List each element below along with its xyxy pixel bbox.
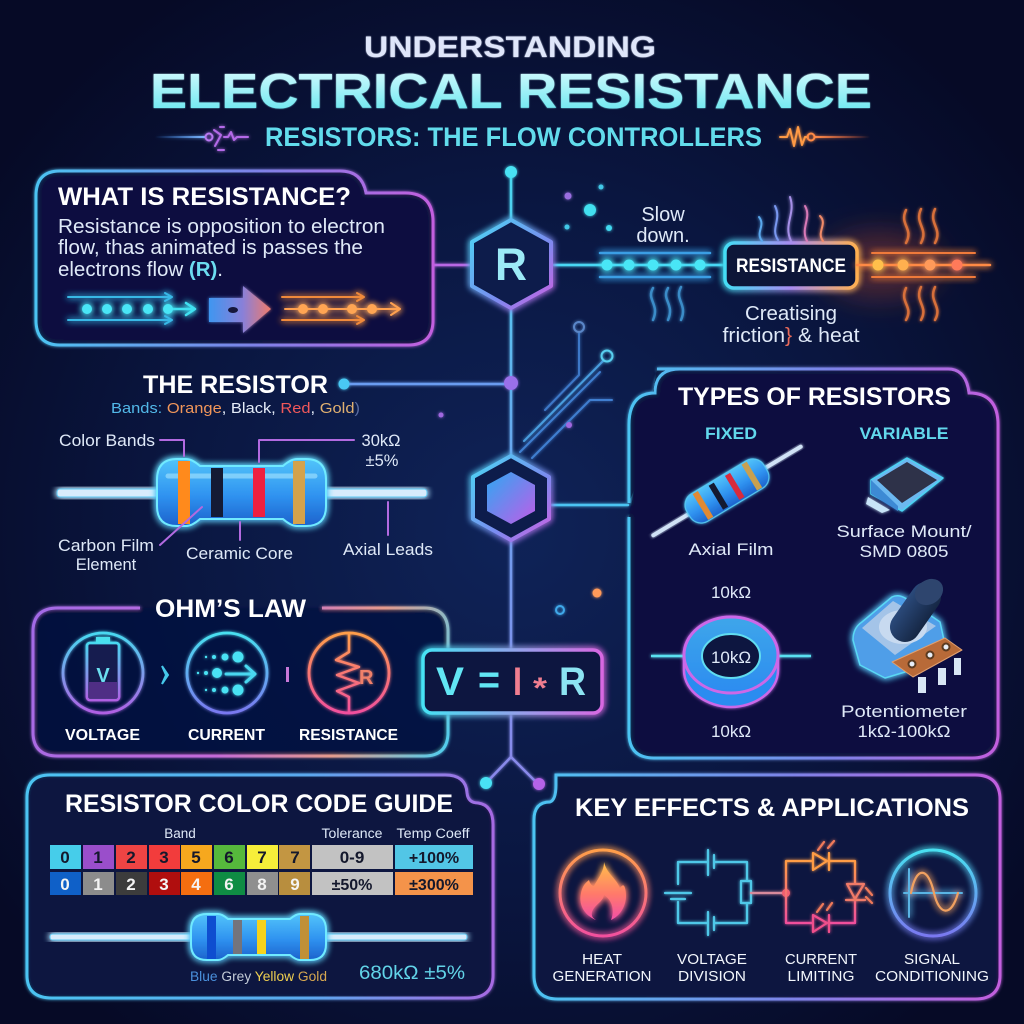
- title: electrical resistance: ELECTRICAL RESISTANCE: [150, 65, 872, 119]
- callout labels: ±5%: [366, 452, 399, 470]
- resistance label: RESISTANCE: [736, 256, 846, 277]
- heat waves blue: [651, 287, 683, 320]
- color table row 2: ±300%: [409, 877, 459, 894]
- heat waves orange top: [904, 209, 937, 243]
- icon: subtitle left circuit: [155, 127, 248, 150]
- label: creating friction: Creatising: [745, 303, 837, 325]
- panel: key effects and applications: [534, 775, 1000, 999]
- label: creating friction: friction} & heat: [722, 325, 860, 347]
- formula text: =: [478, 658, 500, 702]
- callout lines: [160, 440, 388, 545]
- label: potentiometer: Potentiometer: [841, 702, 967, 721]
- color table row 1: [50, 845, 473, 869]
- orange glow: [820, 231, 940, 299]
- central spine connector: [338, 166, 724, 790]
- section: the resistor: [57, 371, 433, 574]
- color table row 2: 4: [191, 875, 201, 894]
- icon: axial resistor: [643, 432, 811, 550]
- table headers: Tolerance: [322, 826, 382, 841]
- band name caption: Blue Grey Yellow Gold: [190, 969, 327, 984]
- body text: Resistance is opposition to electron: [58, 216, 385, 238]
- color table row 2: 2: [126, 875, 136, 894]
- heading: RESISTOR COLOR CODE GUIDE: [65, 790, 453, 818]
- color table row 1: 2: [126, 848, 136, 867]
- formula: V = I * R: [423, 650, 602, 713]
- table headers: [164, 826, 470, 841]
- callout labels: Axial Leads: [343, 541, 433, 559]
- title: understanding: UNDERSTANDING: [364, 31, 656, 64]
- color table row 1: 7: [257, 848, 267, 867]
- resistor body: [157, 459, 326, 526]
- icon: SMD resistor: [866, 458, 943, 513]
- heat waves above box: [759, 197, 823, 241]
- formula text: I: [513, 660, 522, 704]
- band: gold: [300, 916, 309, 959]
- electrons before resistance: [68, 293, 195, 324]
- icon labels: [65, 727, 398, 744]
- band: grey: [233, 920, 242, 954]
- table headers: Temp Coeff: [396, 826, 470, 841]
- heat waves orange bottom: [904, 287, 937, 320]
- effect labels: HEAT: [582, 951, 622, 968]
- hexagon core node: [473, 456, 549, 540]
- effect labels: SIGNAL: [904, 951, 960, 968]
- effect labels: CONDITIONING: [875, 968, 989, 985]
- operator bar: [286, 667, 289, 682]
- color table row 2: 9: [290, 875, 300, 894]
- band: yellow: [257, 920, 266, 954]
- icon: voltage: [63, 633, 143, 713]
- panel: types of resistors: [629, 369, 998, 758]
- icon: voltage divider circuit: [665, 850, 751, 935]
- heading: TYPES OF RESISTORS: [678, 383, 951, 411]
- icon: disc resistor: [651, 617, 811, 707]
- icon labels: RESISTANCE: [299, 727, 398, 744]
- label: 10k center: 10kΩ: [711, 648, 751, 667]
- icon: resistance: [309, 633, 389, 713]
- color table row 1: 5: [191, 848, 201, 867]
- title block: [150, 31, 872, 152]
- arrow: chevron: [162, 666, 168, 684]
- color table row 2: 6: [224, 875, 234, 894]
- label: surface mount: [836, 522, 972, 561]
- circuit traces and decorative nodes: [438, 184, 612, 614]
- hexagon R node: [472, 220, 551, 308]
- color table row 2: 3: [159, 875, 169, 894]
- label: potentiometer: [841, 702, 967, 741]
- icon: current limiting circuit: [751, 841, 872, 932]
- label: creating friction: [722, 303, 860, 347]
- label: potentiometer: 1kΩ-100kΩ: [858, 722, 950, 741]
- color table row 2: 0: [60, 875, 70, 894]
- heading: WHAT IS RESISTANCE?: [58, 183, 351, 211]
- resistor body: [191, 914, 326, 960]
- callout labels: 30kΩ: [362, 432, 400, 450]
- icon: voltage: V: [96, 665, 110, 687]
- formula text: [436, 658, 586, 705]
- band: red: [253, 468, 265, 517]
- electrons slowing: [600, 253, 710, 277]
- color table row 2: 8: [257, 875, 267, 894]
- leads: [50, 934, 467, 940]
- leads: [57, 489, 427, 497]
- label: 10k bottom: 10kΩ: [711, 722, 751, 741]
- icon labels: CURRENT: [188, 727, 265, 744]
- panel border: [33, 608, 448, 756]
- effect labels: VOLTAGE: [677, 951, 747, 968]
- resistance box: [725, 243, 857, 288]
- panel: resistor color code guide: [27, 775, 493, 998]
- electrons hot: [857, 253, 990, 277]
- effect labels: LIMITING: [788, 968, 854, 985]
- panel: ohm's law: [33, 595, 448, 756]
- label: surface mount: Surface Mount/: [836, 522, 972, 541]
- arrow: resistance block: [209, 286, 271, 333]
- icon: subtitle right resistor: [780, 127, 870, 146]
- effect labels: [552, 951, 989, 985]
- band: blue: [207, 916, 216, 959]
- panel: what is resistance: [36, 171, 433, 345]
- effect labels: CURRENT: [785, 951, 857, 968]
- label: slow down: Slow: [641, 204, 685, 226]
- label: 10k top: 10kΩ: [711, 583, 751, 602]
- band: gold: [293, 461, 305, 524]
- label: surface mount: SMD 0805: [860, 542, 948, 561]
- body text: flow, thas animated is passes the: [58, 237, 363, 259]
- color table row 1: 1: [93, 848, 103, 867]
- color table row 1: 7: [290, 848, 300, 867]
- formula box: [423, 650, 602, 713]
- flow diagram: resistance: [600, 197, 990, 347]
- heading: THE RESISTOR: [143, 371, 328, 399]
- body text: electrons flow (R).: [58, 259, 223, 281]
- value: 680kΩ ±5%: [359, 963, 465, 984]
- color table row 2: ±50%: [332, 877, 372, 894]
- effect labels: DIVISION: [678, 968, 746, 985]
- color table row 1: +100%: [409, 850, 459, 867]
- band legend: Bands: Orange , Black, Red, Gold ): [111, 401, 360, 417]
- band: black: [211, 468, 223, 517]
- formula text: *: [533, 672, 547, 705]
- letter R: R: [495, 239, 527, 290]
- color table row 1: 0: [60, 848, 70, 867]
- callout labels: Carbon Film: [58, 537, 154, 555]
- icon labels: VOLTAGE: [65, 727, 140, 744]
- callout labels: Color Bands: [59, 432, 155, 450]
- table headers: Band: [164, 826, 196, 841]
- panel border: [27, 775, 493, 998]
- color table row 2: [50, 872, 473, 895]
- icon: current: [187, 633, 267, 713]
- callout labels: Element: [76, 556, 137, 574]
- icon: signal: [890, 850, 976, 936]
- panel border: [629, 369, 998, 758]
- subtitle: RESISTORS: THE FLOW CONTROLLERS: [265, 122, 762, 152]
- electrons after resistance: [282, 293, 400, 324]
- band: orange: [178, 461, 190, 524]
- body highlight: [168, 474, 315, 478]
- callout labels: [58, 432, 433, 574]
- icon: resistance: R: [359, 667, 374, 689]
- effect labels: GENERATION: [552, 968, 652, 985]
- label: slow down: [636, 204, 690, 247]
- panel border: [36, 171, 433, 345]
- label: axial film: Axial Film: [688, 540, 774, 559]
- color table row 1: 3: [159, 848, 169, 867]
- heading: KEY EFFECTS & APPLICATIONS: [575, 794, 969, 822]
- formula text: R: [559, 660, 586, 704]
- column heading: variable: VARIABLE: [860, 424, 948, 443]
- heading: OHM’S LAW: [155, 595, 306, 623]
- color table row 2: 1: [93, 875, 103, 894]
- body text: [58, 216, 385, 281]
- callout labels: Ceramic Core: [186, 545, 293, 563]
- label: slow down: down.: [636, 225, 690, 247]
- icon: potentiometer: [853, 574, 962, 693]
- icon: heat: [560, 850, 646, 936]
- color table row 1: 0-9: [340, 848, 364, 867]
- panel border: [534, 775, 1000, 999]
- color table row 1: 6: [224, 848, 234, 867]
- column heading: fixed: FIXED: [705, 424, 757, 443]
- formula text: V: [436, 660, 464, 704]
